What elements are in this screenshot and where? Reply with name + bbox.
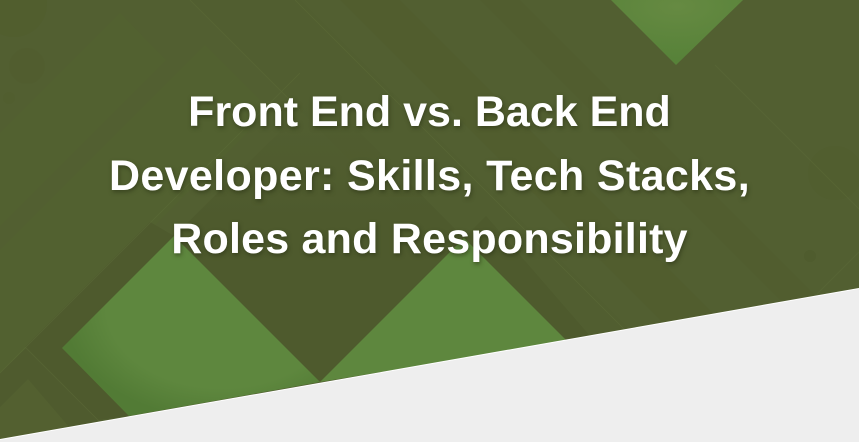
title: Roles and Responsibility	[171, 215, 688, 263]
title: Front End vs. Back End	[188, 88, 671, 136]
title	[109, 88, 750, 266]
green diamond: centre	[320, 238, 566, 382]
lighter chevrons, top left	[0, 13, 166, 226]
diagonal white edge	[0, 288, 859, 440]
green diamond: left	[62, 236, 320, 416]
dark band right of centre diamond	[464, 216, 590, 340]
diagonal stripes	[190, 0, 740, 440]
faint circles	[0, 0, 47, 37]
dark V between diamonds	[174, 92, 464, 382]
title: Developer: Skills, Tech Stacks,	[109, 152, 750, 200]
green diamond: top	[611, 0, 743, 65]
dark band around left diamond	[25, 222, 174, 420]
